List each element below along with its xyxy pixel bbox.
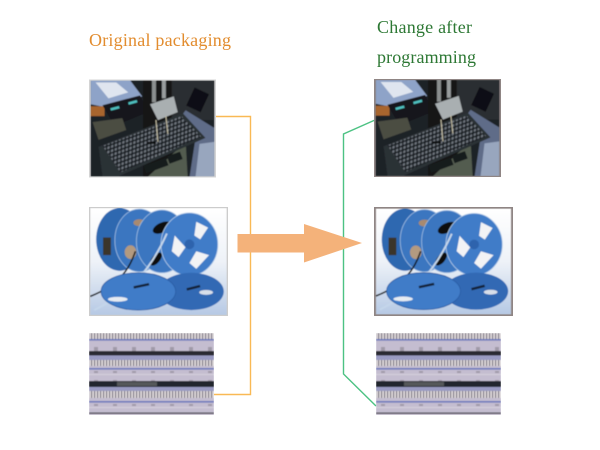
heading: change after programming: Change after: [377, 17, 472, 37]
heading: change after programming: programming: [377, 47, 476, 67]
photo: programmed machine: [374, 79, 501, 177]
arrow: packaging to programmed: [238, 224, 362, 262]
photo: original tape reels: [89, 207, 228, 316]
photo: original programming machine: [89, 80, 216, 178]
heading: original packaging: Original packaging: [89, 30, 231, 50]
photo: programmed tape reels: [374, 207, 513, 316]
orange connector line: [214, 116, 250, 394]
photo: original tube strips: [89, 333, 214, 415]
green connector line: [344, 120, 376, 406]
heading: change after programming: [377, 17, 476, 67]
photo: programmed tube strips: [376, 333, 501, 415]
